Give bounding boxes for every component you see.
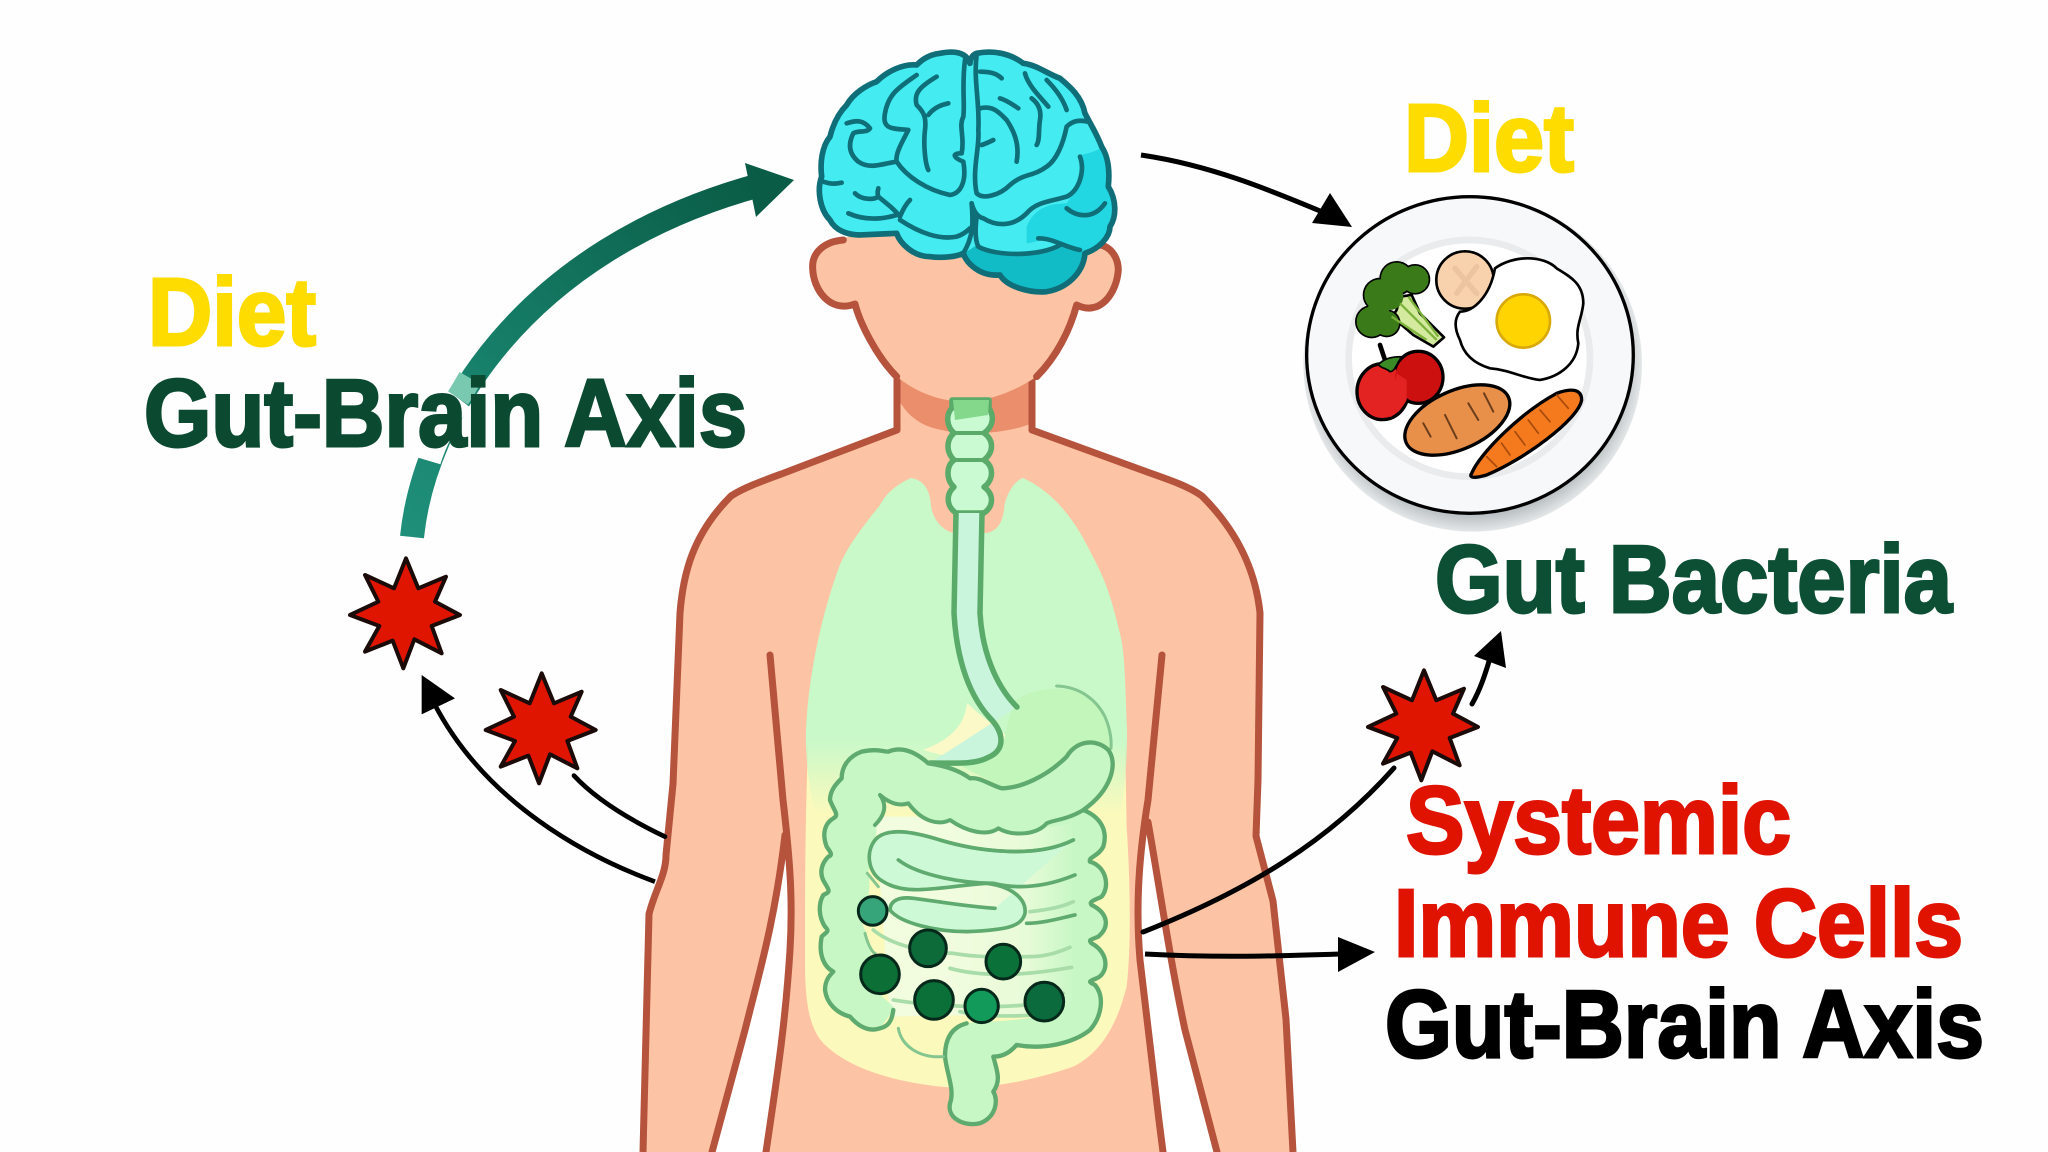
plate of food	[1303, 196, 1642, 532]
brain outline	[819, 52, 1115, 292]
pale yellow gap above colon	[923, 703, 1005, 760]
tomato	[1357, 345, 1443, 420]
esophagus and trachea	[930, 400, 1017, 763]
fried egg	[1456, 258, 1583, 380]
label: Immune Cells: Immune Cells	[1394, 870, 1963, 977]
head and ears	[813, 197, 1118, 402]
label: Systemic: Systemic	[1406, 767, 1791, 874]
broccoli	[1355, 261, 1444, 347]
arrow: body to right star	[1143, 768, 1394, 932]
arrow: brain to plate	[1141, 155, 1352, 227]
bread roll	[1394, 370, 1520, 470]
immune star left lower	[486, 673, 596, 783]
gaps between arms and torso	[712, 835, 792, 1152]
cerebellum	[963, 245, 1085, 292]
label: Gut-Brain Axis right: Gut-Brain Axis	[1385, 971, 1984, 1078]
small intestine backdrop	[875, 817, 1077, 1017]
label: Gut Bacteria: Gut Bacteria	[1435, 526, 1953, 633]
label: Gut-Brain Axis left: Gut-Brain Axis	[144, 360, 747, 467]
lungs	[806, 478, 1127, 815]
plate	[1303, 196, 1642, 532]
immune star right	[1368, 670, 1478, 780]
ascending colon inner edge and lower curve	[865, 873, 943, 1057]
torso and arm creases	[712, 655, 1217, 1152]
label: Diet right: Diet	[1404, 85, 1574, 192]
small intestine folds, pale	[873, 902, 1073, 1016]
colon and small intestine	[820, 742, 1113, 1124]
gut bacteria dots	[858, 897, 1064, 1023]
human body	[643, 370, 1293, 1152]
abdominal yellow region	[805, 737, 1130, 1088]
label: Diet left: Diet	[148, 259, 316, 366]
arrow: body to immune cells label	[1145, 937, 1375, 972]
brain	[819, 52, 1115, 292]
body outline	[643, 375, 1293, 1152]
arrows: body to left stars	[422, 675, 665, 882]
arrow: star to gut bacteria	[1472, 631, 1506, 704]
colon fill	[820, 742, 1113, 1124]
carrot	[1471, 390, 1582, 477]
immune star left upper	[350, 558, 460, 668]
stomach	[957, 686, 1112, 793]
brain shaded side	[1027, 147, 1115, 253]
potato	[1436, 251, 1494, 309]
neck shadow	[897, 370, 1030, 433]
brain folds	[823, 55, 1105, 254]
arrow: green curved to brain	[412, 163, 794, 537]
colon outline	[820, 742, 1113, 1124]
transverse colon lower edge	[875, 795, 1083, 834]
small intestine loops	[869, 832, 1073, 932]
